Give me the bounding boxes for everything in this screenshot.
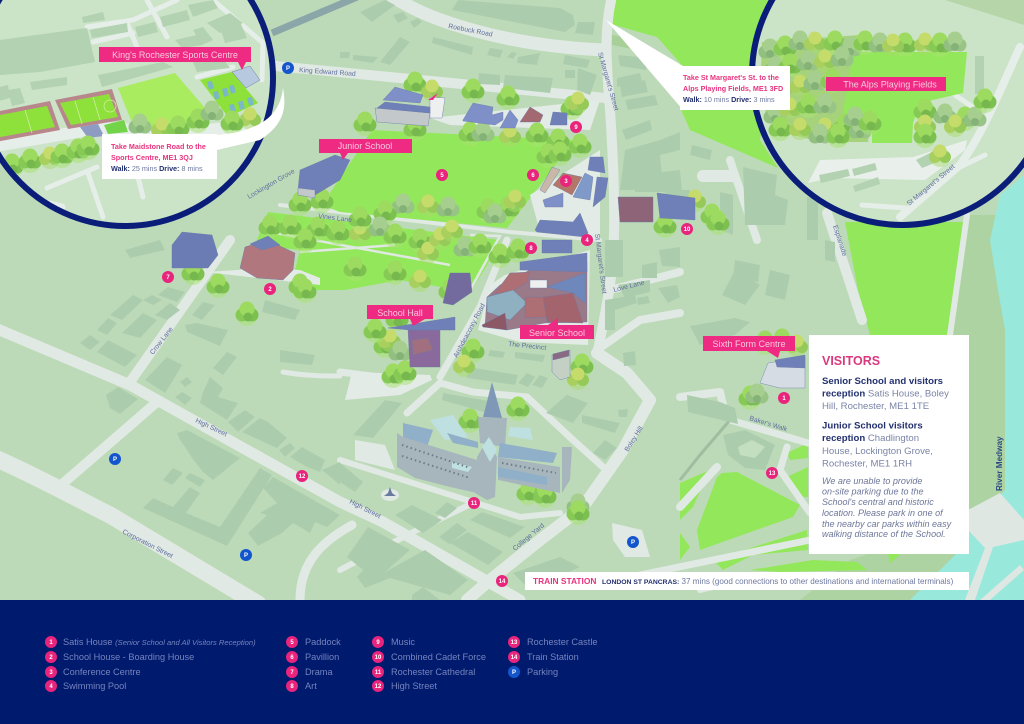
location number markers: [162, 121, 790, 587]
legend: locations key: Parking: [527, 667, 558, 677]
label: junior school: Junior School: [338, 141, 392, 151]
street names: King Edward Road: [299, 67, 356, 78]
building: senior school: [482, 240, 587, 330]
inset roads: [0, 0, 270, 217]
street names: High Street: [194, 417, 228, 438]
location number markers: 5: [440, 173, 444, 179]
callout: sports centre directions: Walk: 25 mins Drive: 8 mins: [111, 164, 203, 173]
street names: St Margaret's Street: [906, 163, 957, 208]
background buildings: [80, 0, 835, 600]
building: combined cadet force: [618, 193, 695, 222]
river medway water: [910, 175, 1024, 600]
location number markers: 10: [684, 227, 691, 233]
hockey pitch right: [55, 89, 122, 129]
label: school hall: School Hall: [377, 308, 423, 318]
legend: locations key: 9: [376, 640, 380, 646]
legend: locations key: Rochester Cathedral: [391, 667, 475, 677]
train station bar: [525, 572, 969, 590]
building: art hall north: [443, 273, 472, 305]
art pointer: [428, 93, 438, 100]
pitch lines: [25, 97, 116, 133]
location number markers: 9: [574, 125, 578, 131]
legend: locations key: 2: [49, 655, 53, 661]
label: school hall: [367, 305, 433, 326]
panel: visitors information: Rochester, ME1 1RH: [822, 458, 912, 470]
inset ring: right: [752, 0, 1024, 225]
hockey pitch left: [0, 101, 60, 142]
building: gatehouse: [552, 350, 570, 380]
street names: Vines Lane: [318, 213, 352, 224]
alps woodland mass: [760, 35, 870, 142]
castle wall: [680, 420, 730, 480]
label: sports centre: King's Rochester Sports Centre: [112, 50, 238, 60]
legend: locations key: School House - Boarding House: [63, 652, 194, 662]
legend: locations key: Combined Cadet Force: [391, 652, 486, 662]
inset ring: left: [0, 0, 273, 226]
gardens near castle keep inner: [738, 440, 765, 458]
location number markers: 12: [299, 474, 306, 480]
legend: locations key: 4: [49, 684, 53, 690]
panel: visitors information: walking distance of the School.: [822, 529, 946, 539]
legend: locations key: Satis House (Senior School and All Visitors Reception): [63, 637, 256, 647]
panel: visitors information: Senior School and visitors: [822, 376, 943, 387]
panel: visitors information: VISITORS: [822, 354, 880, 368]
building: conference centre: [540, 157, 608, 207]
legend: locations key: Music: [391, 637, 415, 647]
callout: alps directions: [606, 20, 790, 110]
alps trees: [758, 30, 996, 167]
legend: locations key: 13: [511, 640, 518, 646]
panel: visitors information: on-site parking due to the: [822, 486, 924, 496]
street names: College Yard: [512, 522, 546, 553]
location number markers: 2: [268, 287, 272, 293]
legend: locations key: Rochester Castle: [527, 637, 597, 647]
legend: locations key: Train Station: [527, 652, 579, 662]
legend: locations key: Paddock: [305, 637, 341, 647]
jetty road: [980, 565, 1024, 600]
legend: locations key: High Street: [391, 681, 437, 691]
left inset circle: kings rochester sports centre: [0, 0, 275, 226]
pavilion: [80, 124, 104, 138]
label: senior school: [520, 318, 594, 339]
building: music row: [463, 103, 567, 128]
location number markers: 13: [769, 471, 776, 477]
callout: alps directions: Take St Margaret's St. to the: [683, 73, 779, 82]
train station bar: TRAIN STATION: [533, 576, 596, 586]
parking markers: P: [244, 553, 248, 559]
school buildings: [172, 87, 805, 388]
tennis courts: [200, 72, 258, 117]
label: alps playing fields: The Alps Playing Fields: [843, 80, 937, 90]
parking markers: [109, 62, 639, 561]
legend: locations key: 1: [49, 640, 53, 646]
legend: locations key: [45, 636, 597, 692]
building: school house: [240, 236, 295, 280]
alps road: [862, 47, 1020, 217]
street names: Crow Lane: [149, 326, 175, 356]
location number markers: 11: [471, 501, 478, 507]
small pitch: [104, 120, 128, 134]
legend: locations key: 11: [375, 670, 382, 676]
campus grounds: [205, 100, 600, 400]
street names: Corporation Street: [121, 529, 174, 560]
street names: High Street: [348, 499, 382, 520]
building: swimming pool: [535, 213, 588, 237]
street names: St Margaret's Street: [593, 233, 607, 294]
tennis court surfaces: [207, 81, 254, 113]
label: sports centre: [99, 47, 251, 70]
sports centre building: [232, 66, 260, 88]
legend: locations key: P: [512, 670, 516, 676]
label: senior school: Senior School: [529, 328, 585, 338]
location number markers: 7: [166, 275, 170, 281]
parking markers: P: [113, 457, 117, 463]
callout: alps directions: Walk: 10 mins Drive: 3 mins: [683, 95, 775, 104]
legend: locations key: 12: [375, 684, 382, 690]
parking area by boley hill: [612, 523, 650, 557]
legend: locations key: 14: [511, 655, 518, 661]
label: alps playing fields: [826, 77, 946, 91]
street names: The Precinct: [508, 341, 547, 352]
legend: locations key: 6: [290, 655, 294, 661]
legend: locations key: Conference Centre: [63, 667, 141, 677]
street names: [121, 23, 1004, 560]
panel: visitors information: Hill, Rochester, ME1 1TE: [822, 401, 929, 412]
parking markers: P: [631, 540, 635, 546]
inset buildings: [0, 0, 247, 106]
panel: visitors information: We are unable to provide: [822, 476, 922, 486]
location number markers: 6: [531, 173, 535, 179]
monument on high street: [381, 487, 399, 501]
jetty: [965, 493, 1024, 600]
callout: sports centre directions: Take Maidstone Road to the: [111, 142, 206, 151]
location number markers: 1: [782, 396, 786, 402]
street names: Esplanade: [831, 224, 848, 257]
location number markers: 14: [499, 579, 506, 585]
street names: Lockington Grove: [246, 168, 296, 201]
street names: Love Lane: [613, 279, 646, 294]
street names: Roebuck Road: [448, 23, 493, 39]
panel: visitors information: Junior School visitors: [822, 420, 923, 432]
alps buildings: [819, 56, 984, 192]
panel: visitors information: [809, 335, 969, 554]
building: school hall: [388, 317, 455, 367]
sports field: [118, 73, 205, 130]
location number markers: 4: [585, 238, 589, 244]
street names: St Margaret's Street: [596, 52, 619, 112]
panel: visitors information: School's central and historic: [822, 497, 934, 507]
footer panel: [0, 600, 1024, 724]
corner tint: [945, 0, 1024, 25]
legend: locations key: 8: [290, 684, 294, 690]
building: junior school: [298, 155, 350, 198]
panel: visitors information: House, Lockington Grove,: [822, 446, 933, 457]
street names: River Medway: [995, 436, 1004, 491]
label: junior school: [319, 139, 412, 160]
legend: locations key: Art: [305, 681, 317, 691]
legend: locations key: 5: [290, 640, 294, 646]
river bank: [800, 215, 1010, 600]
panel: visitors information: reception Satis House, Boley: [822, 388, 949, 400]
cathedral: [397, 382, 572, 500]
callout: alps directions: Alps Playing Fields, ME1 3FD: [683, 84, 783, 93]
green: alps field outside circle: [607, 0, 780, 168]
green: riverside field: [845, 222, 965, 335]
location number markers: 3: [564, 179, 568, 185]
building: art block: [375, 87, 445, 126]
panel: visitors information: reception Chadlington: [822, 433, 919, 444]
callout: sports centre directions: Sports Centre, ME1 3QJ: [111, 153, 193, 162]
building: drama: [172, 232, 218, 268]
right inset circle: the alps playing fields: [750, 0, 1024, 225]
legend: locations key: 7: [290, 670, 294, 676]
inset trees: [0, 100, 261, 178]
building: sixth form centre: [760, 355, 805, 388]
panel: visitors information: location. Please park in one of: [822, 508, 944, 518]
top-left trees canopy near map edge: [34, 0, 96, 23]
location number markers: 8: [529, 246, 533, 252]
callout: sports centre directions: [102, 88, 284, 179]
legend: locations key: 3: [49, 670, 53, 676]
panel: visitors information: the nearby car parks within easy: [822, 519, 952, 529]
legend: locations key: Pavillion: [305, 652, 339, 662]
walkway lines across the grounds: [270, 232, 500, 290]
street names: Baker's Walk: [748, 415, 789, 434]
alps car park: [808, 140, 967, 183]
legend: locations key: 10: [375, 655, 382, 661]
street names: Boley Hill: [624, 425, 645, 453]
legend: locations key: Drama: [305, 667, 333, 677]
grey road at top: [272, 0, 362, 33]
legend: locations key: Swimming Pool: [63, 681, 126, 691]
tree clusters around campus: [182, 72, 808, 525]
train station bar: LONDON ST PANCRAS: 37 mins (good connections to other destinations and international terminals): [602, 577, 954, 586]
green: castle gardens: [680, 443, 902, 572]
central green fields: [255, 130, 575, 292]
road network: [0, 0, 967, 604]
alps field: [837, 52, 967, 143]
street names: Archdeaconry Road: [453, 302, 487, 359]
parking markers: P: [286, 66, 290, 72]
label: sixth form centre: Sixth Form Centre: [712, 339, 786, 349]
label: sixth form centre: [703, 336, 795, 358]
cathedral close paving: [355, 440, 395, 470]
